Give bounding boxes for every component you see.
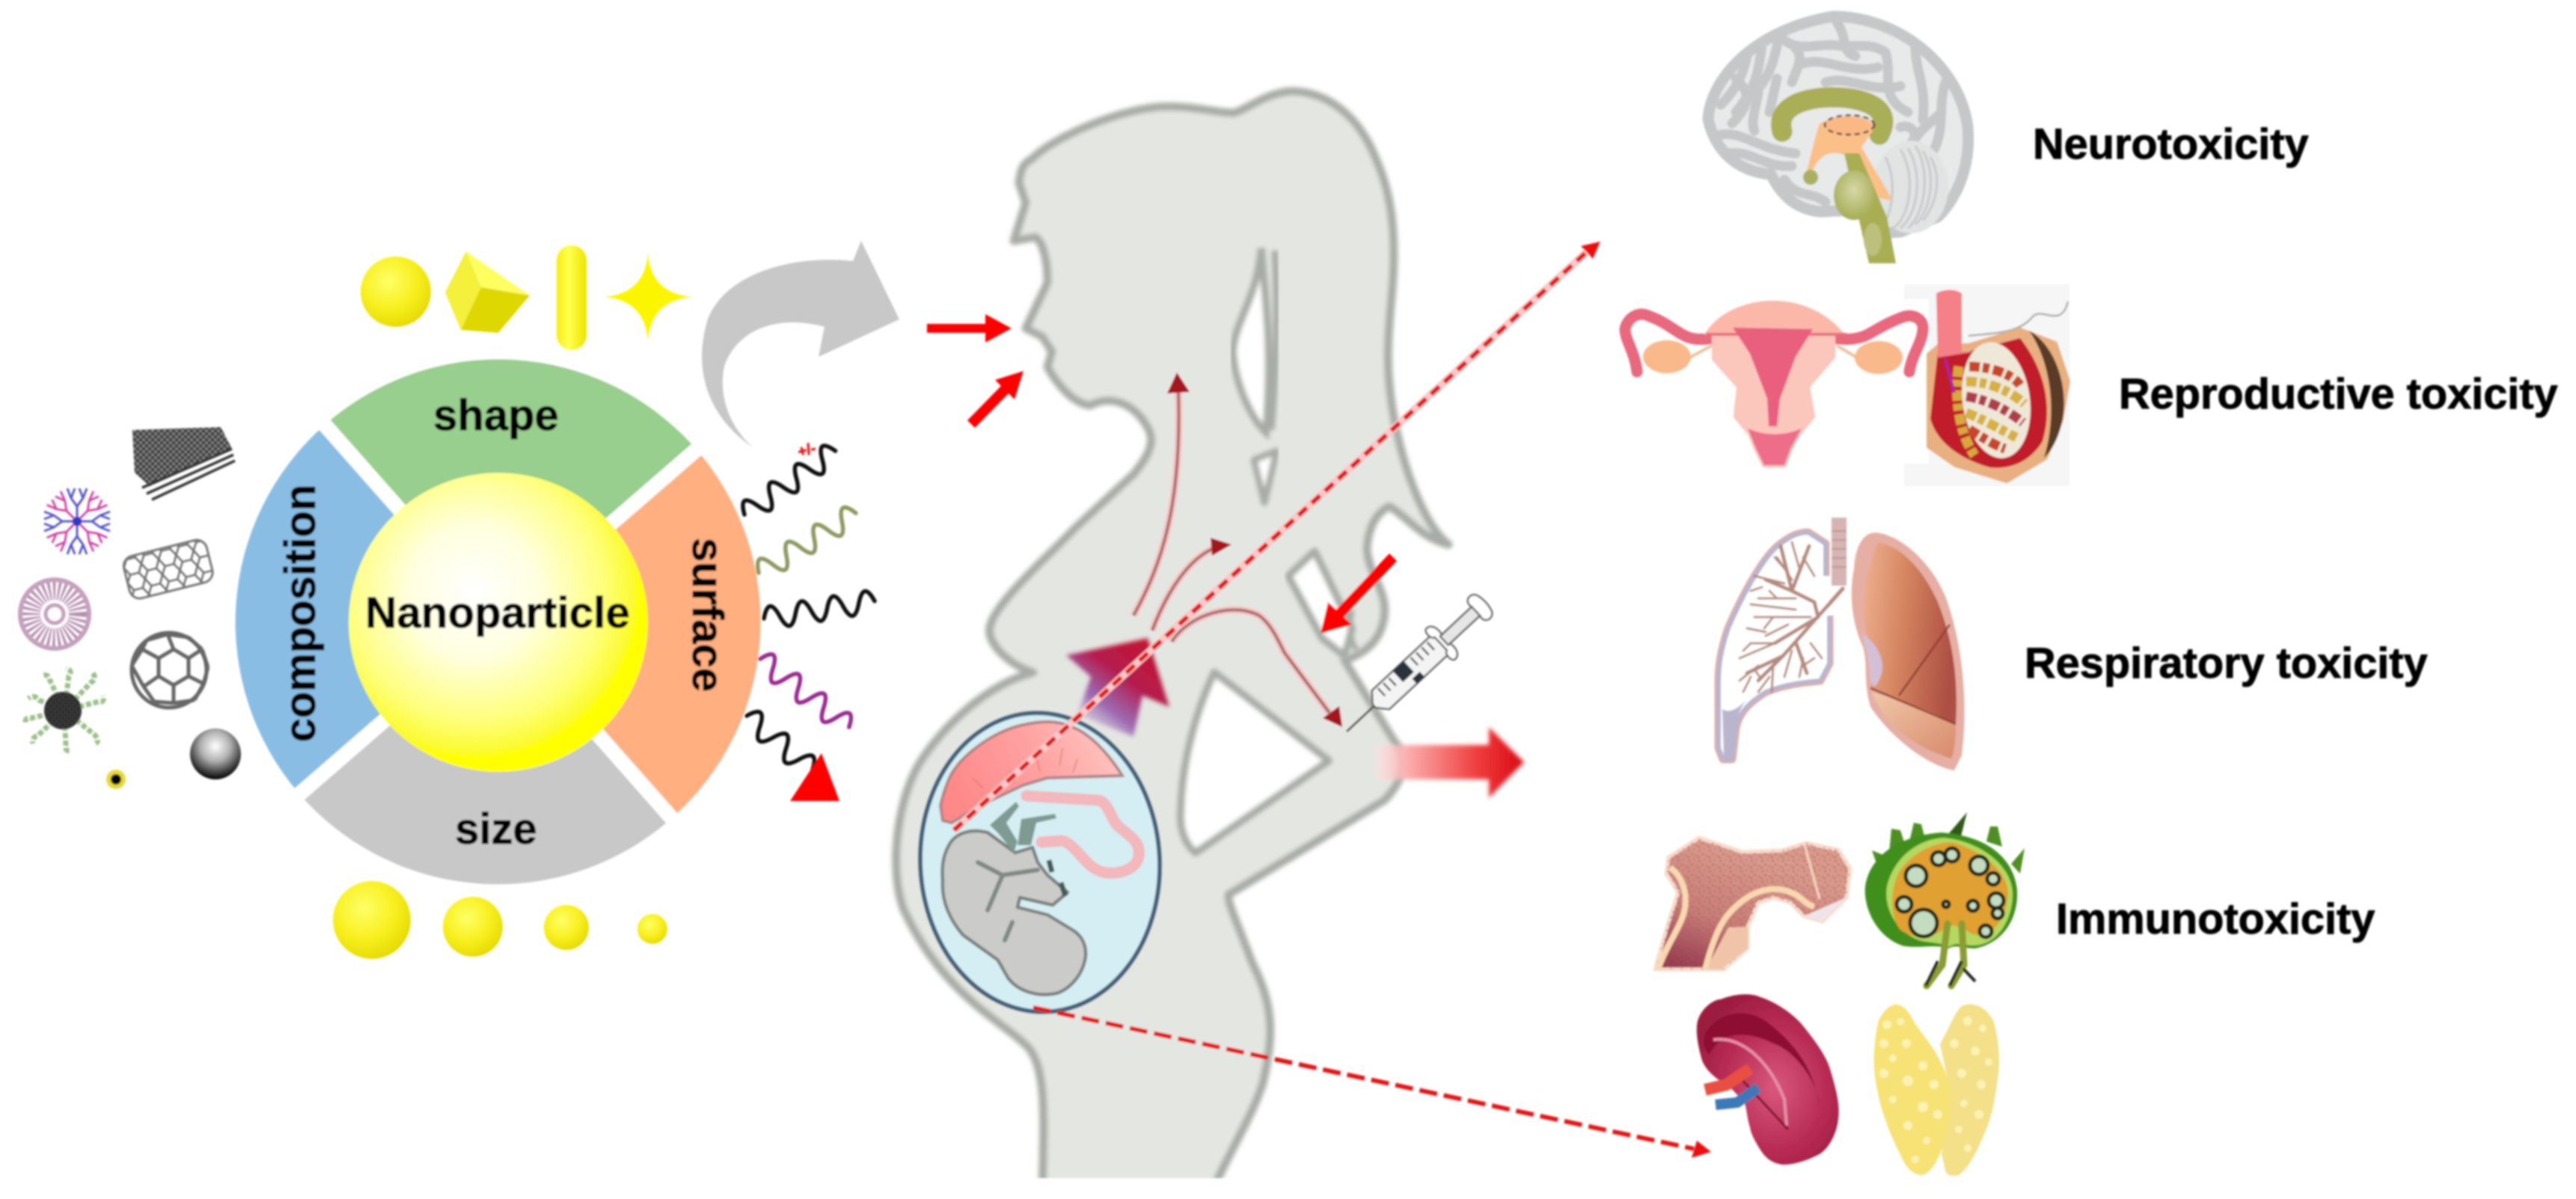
ligand: black chain <box>762 590 876 630</box>
icon: quantum dot <box>106 770 126 789</box>
organ: lungs <box>1719 518 1965 770</box>
icon: micelle <box>25 669 103 751</box>
cardiac notch <box>1861 634 1882 686</box>
label: plus minus charge: +/- <box>796 440 818 461</box>
vein <box>1716 1088 1758 1105</box>
organ: spleen <box>1697 994 1839 1165</box>
label: shape: shape <box>433 391 559 440</box>
bone body <box>1655 838 1850 969</box>
fetus hand wedges <box>990 802 1019 853</box>
ligand: purple chain <box>753 650 856 736</box>
icon: liposome <box>20 580 89 648</box>
arrow: placenta up-arrow <box>1066 638 1169 737</box>
lower lobe <box>1872 693 1956 758</box>
right lobe <box>1940 1005 1999 1176</box>
icon: black sphere <box>190 729 241 779</box>
spikes <box>1872 812 2025 874</box>
corpus callosum <box>1781 97 1883 135</box>
umbilical cord <box>1027 796 1139 873</box>
ligand: charged <box>738 440 842 524</box>
right ovary <box>1855 341 1903 374</box>
label: size: size <box>455 805 537 853</box>
placenta <box>940 722 1122 823</box>
icon: syringe <box>1333 587 1499 746</box>
arm-hair gap <box>1288 551 1357 656</box>
panel: pregnant body <box>896 91 1448 1197</box>
seminiferous lobules <box>1957 367 2025 456</box>
hilum vessels <box>1927 924 1964 986</box>
organ: brain <box>1708 16 1968 263</box>
neck gap <box>1233 248 1276 503</box>
compact bone lines <box>1658 868 1814 969</box>
icon: small sphere <box>637 914 667 944</box>
outer tunica <box>1929 330 2068 481</box>
icon: fullerene <box>132 633 208 708</box>
wheel segment: size <box>298 622 673 884</box>
fundus <box>1704 301 1845 335</box>
arrow: dashed line to lower organs <box>1033 1008 1711 1158</box>
icon: rod <box>557 245 587 350</box>
white sheath <box>1955 337 2037 463</box>
body silhouette <box>896 91 1448 1197</box>
panel: nanoparticle properties wheel <box>236 359 761 884</box>
pleural wedge <box>1722 699 1747 757</box>
brainstem <box>1834 153 1896 263</box>
label: Respiratory toxicity: Respiratory toxicity <box>2025 640 2428 687</box>
orange medulla <box>1892 842 2008 937</box>
arrow: dermal exposure <box>1321 553 1397 634</box>
follicles <box>1897 848 2004 937</box>
organ: femur bone <box>1655 838 1850 969</box>
lesser trochanter <box>1706 927 1748 969</box>
image backdrop <box>1904 284 2069 486</box>
womb <box>913 707 1167 1018</box>
wheel segment: shape <box>323 359 696 622</box>
outer capsule <box>1865 832 2017 948</box>
wheel segment: surface <box>498 449 761 817</box>
organ: lymph node <box>1865 812 2025 986</box>
icon: sphere <box>361 257 431 327</box>
icon: star <box>604 253 693 341</box>
wheel segment: composition <box>236 426 498 792</box>
upper lobe <box>1864 542 1957 724</box>
ligaments <box>1687 346 1859 359</box>
fetus dark extremities <box>1049 860 1065 896</box>
fissures <box>1870 625 1956 724</box>
fallopian tubes <box>1625 314 1923 372</box>
fetus limb details <box>978 862 1038 940</box>
bronchial tree <box>1740 542 1843 692</box>
cerebrum <box>1708 16 1968 233</box>
left ovary <box>1643 340 1691 373</box>
red inner <box>1930 338 2047 467</box>
opened lung sac outer <box>1719 533 1829 759</box>
icon: large sphere <box>443 897 503 957</box>
icon: graphene stack <box>132 427 235 500</box>
hypothalamus dashed outline <box>1825 115 1874 135</box>
label: Neurotoxicity: Neurotoxicity <box>2033 120 2309 168</box>
surface ligands <box>738 440 876 779</box>
route arrows inside body <box>1133 372 1342 727</box>
fetus <box>942 802 1086 995</box>
dark inner hollow <box>1704 1014 1820 1107</box>
arrow: ingestion diagonal <box>967 371 1024 428</box>
shape examples row <box>361 245 693 350</box>
label: Nanoparticle: Nanoparticle <box>365 589 630 637</box>
icon: dendrimer <box>44 488 110 554</box>
arrow: grey curved arrow to body <box>702 241 899 447</box>
size examples row <box>333 881 667 959</box>
light cortex <box>1886 838 2013 947</box>
hilum ridge <box>1713 1040 1787 1126</box>
cerebellum <box>1873 141 1948 233</box>
growth plate <box>1805 845 1820 899</box>
trachea <box>1832 518 1847 586</box>
uterine body <box>1714 335 1833 465</box>
cervix <box>1748 429 1802 465</box>
arrow: dashed line to upper organs <box>954 242 1600 830</box>
gyri folds <box>1721 22 1945 202</box>
icon: cube <box>445 251 530 333</box>
icon: red targeting triangle <box>790 753 839 801</box>
artery <box>1705 1069 1750 1090</box>
organ: testis <box>1904 284 2069 486</box>
left lobe <box>1874 1005 1951 1175</box>
icon: nanotube <box>121 538 215 601</box>
label: surface: surface <box>683 538 732 692</box>
icon: largest sphere <box>333 881 411 959</box>
route arrow: to neck <box>1133 372 1190 616</box>
organ: yellow thymus lobes <box>1874 1005 1999 1176</box>
arrow: large outgoing red arrow <box>1377 727 1524 798</box>
vas thin line <box>1968 301 2068 336</box>
solid lung pleura <box>1852 533 1965 770</box>
speckled trabecular texture <box>1655 838 1850 969</box>
ligand: targeted chain <box>739 707 819 779</box>
label: Reproductive toxicity: Reproductive toxicity <box>2119 370 2558 418</box>
spermatic cord <box>1936 290 1975 358</box>
label: Immunotoxicity: Immunotoxicity <box>2056 895 2375 943</box>
icon: medium sphere <box>544 905 589 950</box>
femoral neck cartilage <box>1804 898 1847 922</box>
spleen outer <box>1697 994 1839 1165</box>
placenta veins <box>973 748 1077 788</box>
pituitary <box>1803 170 1818 185</box>
ligand: olive chain <box>753 503 862 583</box>
womb sac <box>913 707 1167 1018</box>
dark rim <box>2029 331 2064 458</box>
center sphere <box>349 473 648 772</box>
opened lung sac <box>1719 533 1829 759</box>
fat globules <box>1879 1016 1992 1163</box>
label: composition: composition <box>276 485 325 742</box>
organ: uterus <box>1625 301 1923 465</box>
uterine cavity <box>1733 328 1813 426</box>
arrow: inhalation horizontal <box>927 314 1012 343</box>
route arrow: to arm <box>1172 610 1342 727</box>
route arrow: to chest <box>1152 538 1232 631</box>
composition examples <box>20 427 241 789</box>
arm triangle gap <box>1181 672 1329 853</box>
thalamus region <box>1806 117 1893 200</box>
